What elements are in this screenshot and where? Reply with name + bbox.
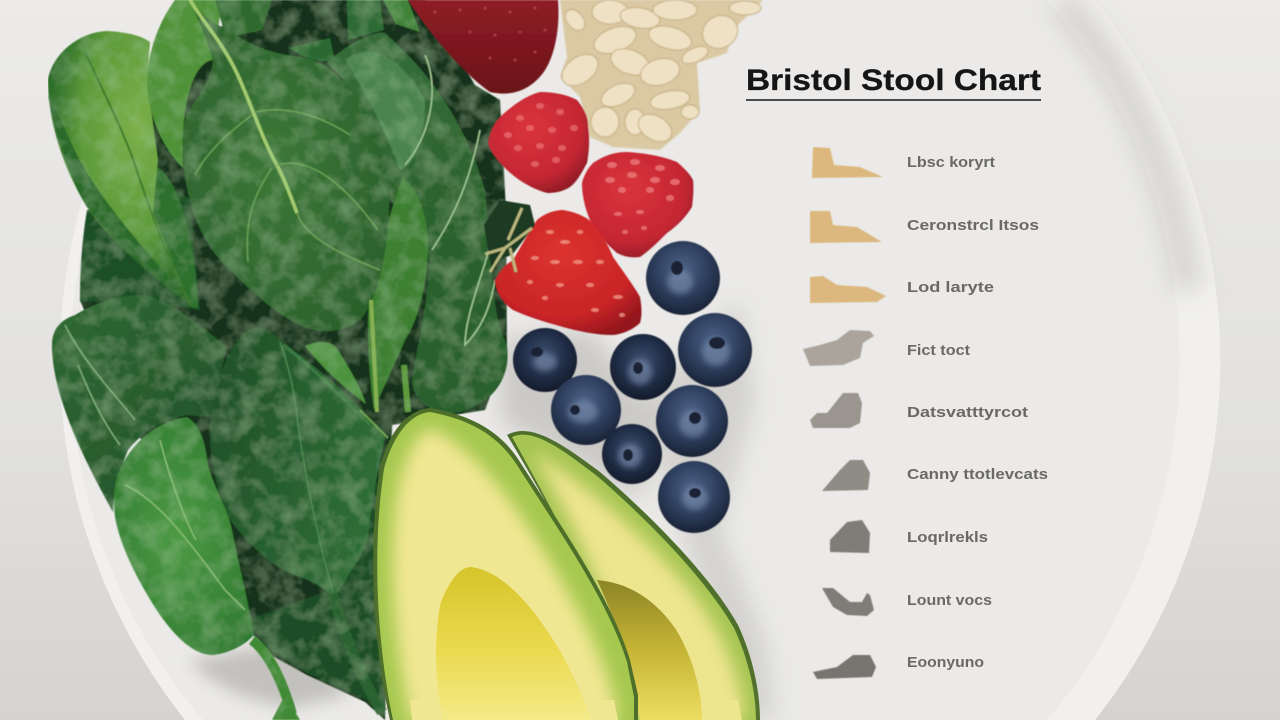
- oats: [556, 0, 763, 150]
- chart row 3: [810, 276, 994, 303]
- raspberry: lower: [582, 152, 693, 257]
- chart row 1: Lbsc koryrt: [907, 154, 995, 171]
- small leaf fragment: [305, 342, 366, 404]
- chart row 4: [803, 330, 970, 366]
- leaf: right large: [327, 33, 508, 414]
- blueberries: [513, 241, 752, 533]
- lower mass under leaves: [247, 480, 385, 718]
- strawberry: middle: [484, 200, 642, 335]
- leaf: top back right: [215, 0, 420, 62]
- plate inner shadow: [1060, 0, 1188, 290]
- leaf: lower centre: [210, 327, 385, 597]
- strawberry calyx: [484, 200, 535, 272]
- dark leaf mass: [80, 0, 507, 720]
- chart row 5: [810, 393, 1028, 428]
- chart row 2: Ceronstrcl Itsos: [907, 217, 1039, 234]
- raspberry: upper: [488, 92, 589, 193]
- leaf: large centre: [183, 0, 389, 331]
- leaf: dark under-left: [80, 189, 200, 310]
- chart row 7: Loqrlrekls: [907, 529, 988, 546]
- blueberry hollows: [531, 261, 725, 498]
- chart row 8: [822, 588, 992, 616]
- chart row 5: Datsvatttyrcot: [907, 404, 1028, 421]
- pit hollow: [597, 580, 702, 720]
- spinach leaves: [48, 0, 508, 720]
- leaf: green behind top-left: [152, 165, 198, 308]
- leaf: bottom left light: [114, 417, 254, 655]
- chart row 1: [812, 147, 995, 178]
- avocado half: right: [507, 431, 760, 720]
- leaf: top narrow: [147, 0, 222, 168]
- blueberry bloom: [533, 270, 730, 510]
- chart row 3: Lod laryte: [907, 279, 994, 296]
- title: Bristol Stool Chart: [746, 64, 1041, 97]
- chart row 7: [830, 520, 988, 553]
- stems upright: [371, 300, 408, 412]
- title underline: [746, 99, 1041, 101]
- avocados: [373, 408, 760, 720]
- chart row 6: Canny ttotlevcats: [907, 466, 1048, 483]
- strawberry: top: [408, 0, 558, 94]
- chart row 4: Fict toct: [907, 342, 970, 359]
- chart row 8: Lount vocs: [907, 592, 992, 609]
- chart row 2: [810, 211, 1039, 243]
- leaf: narrow upright: [368, 177, 428, 410]
- chart row 9: Eoonyuno: [907, 654, 984, 671]
- chart row 9: [813, 654, 984, 679]
- leaf: lower left: [52, 295, 227, 512]
- avocado half: left: [373, 408, 638, 720]
- stems lower: [252, 410, 388, 720]
- leaf: top-left light: [48, 31, 192, 306]
- pit hollow: [436, 567, 591, 720]
- chart row 6: [822, 460, 1048, 491]
- food shadows: [190, 300, 775, 720]
